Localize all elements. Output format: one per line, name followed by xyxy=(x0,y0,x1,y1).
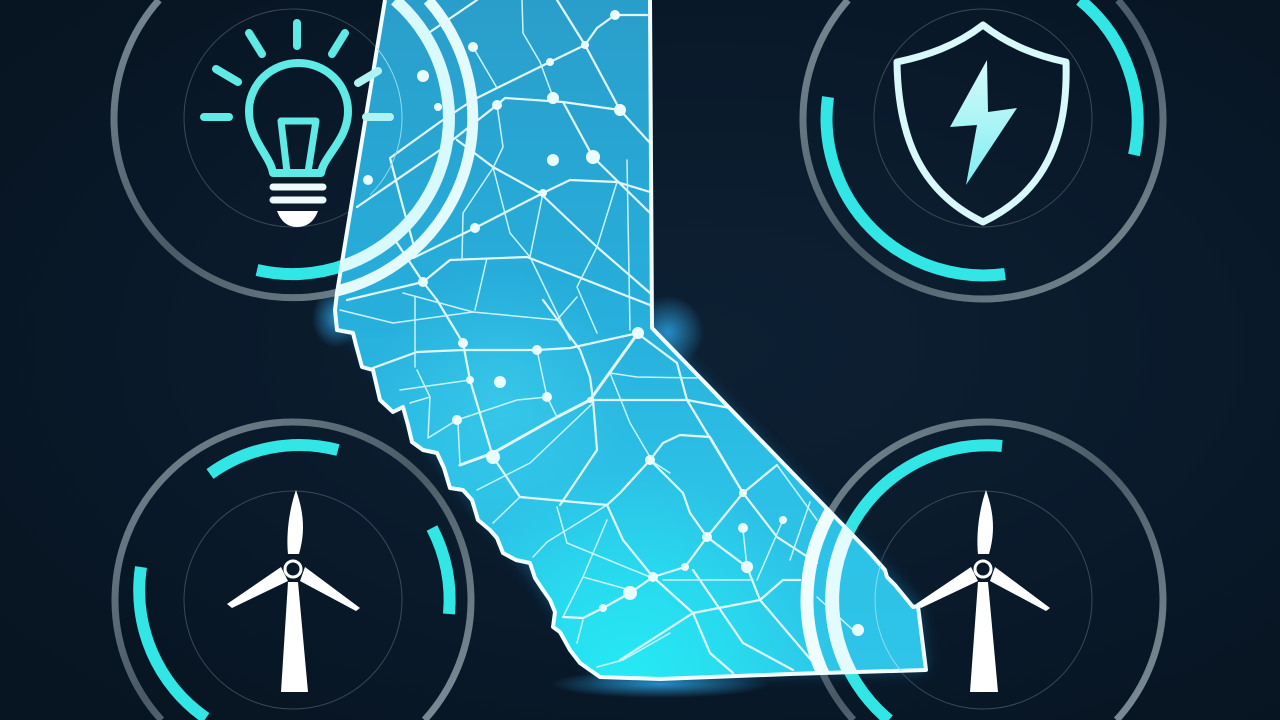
map fill xyxy=(330,0,930,682)
map: California xyxy=(330,0,930,682)
panel: wind turbine gauge left xyxy=(115,422,471,720)
map outline xyxy=(335,0,926,679)
panel: shield gauge xyxy=(803,0,1163,299)
icon: lightbulb xyxy=(204,23,348,227)
panel: wind turbine gauge right xyxy=(807,422,1163,720)
grid nodes xyxy=(363,10,864,636)
map glow xyxy=(312,288,926,698)
icon: wind turbine xyxy=(916,490,1050,692)
grid network lines xyxy=(340,0,853,673)
progress arcs xyxy=(139,445,450,718)
icon: shield with bolt xyxy=(897,25,1066,222)
icon: wind turbine xyxy=(227,490,360,692)
progress arcs xyxy=(827,0,1138,275)
overlay ring: right turbine gauge over map xyxy=(800,509,902,672)
lightbulb rays over map xyxy=(358,71,390,117)
panel: lightbulb gauge xyxy=(114,0,472,298)
overlay ring: lightbulb gauge over map xyxy=(336,0,478,296)
progress arc xyxy=(832,445,1002,720)
progress arc xyxy=(257,265,345,274)
